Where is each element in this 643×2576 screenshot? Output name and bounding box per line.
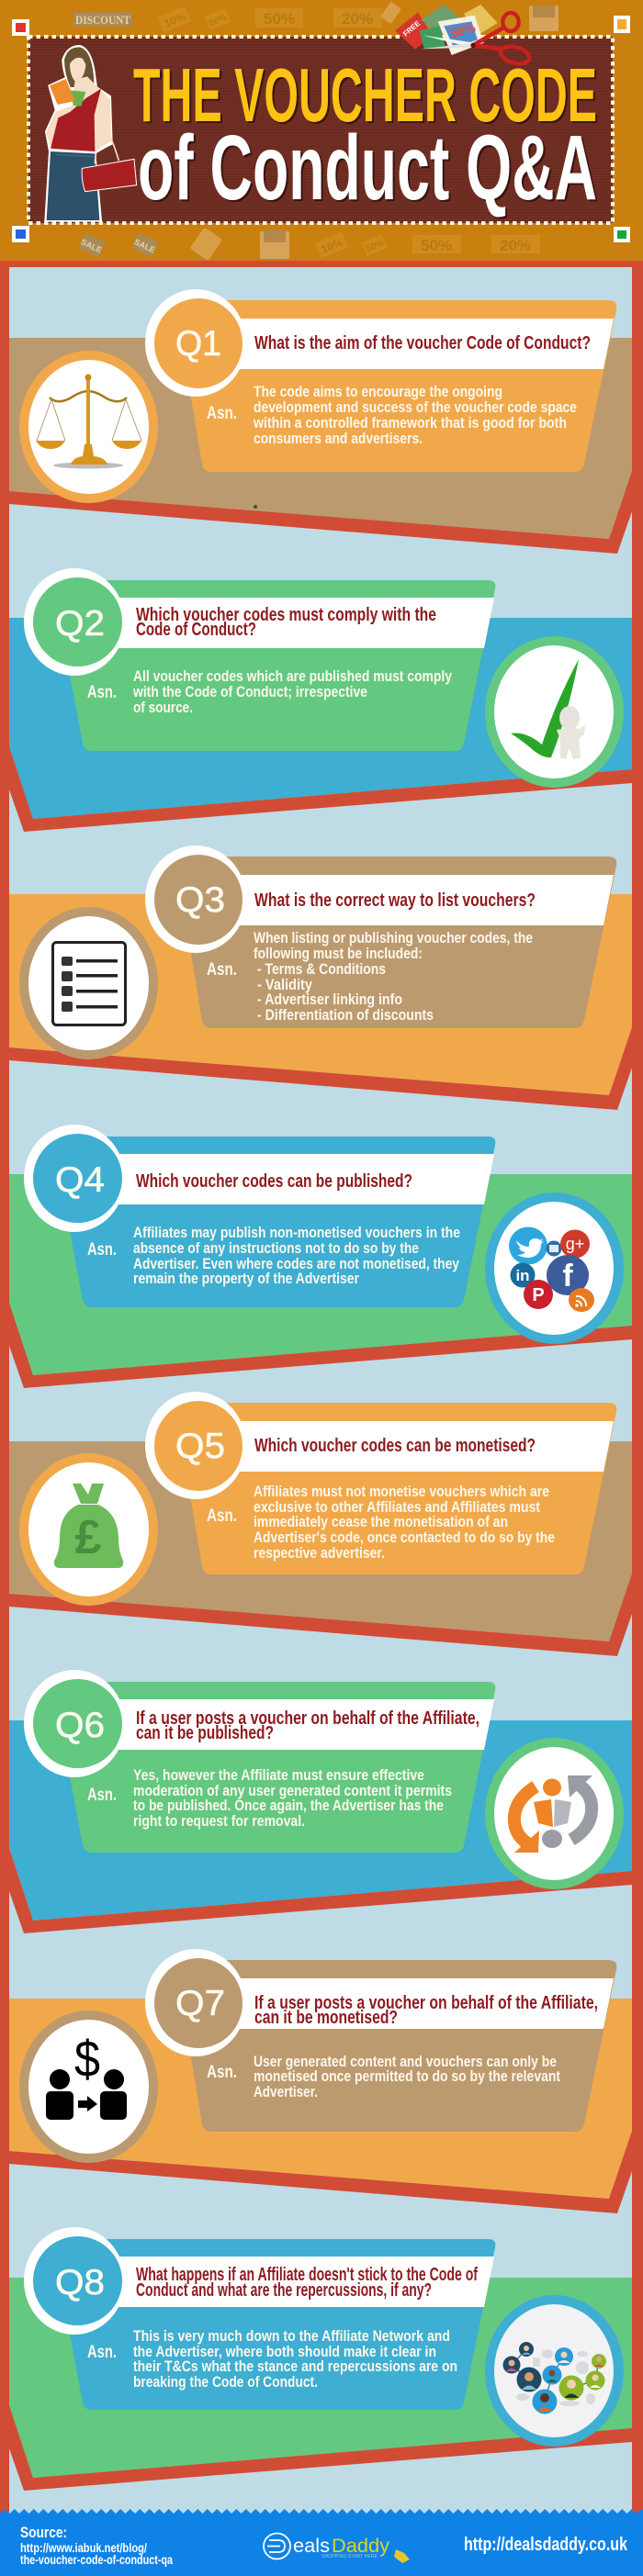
faded discount decorations	[73, 2, 558, 261]
answer: Advertiser's code, once contacted to do so by the	[254, 1529, 555, 1546]
question: Which voucher codes can be published?	[136, 1171, 412, 1192]
faded discount decorations: 50%	[421, 237, 452, 254]
badge label: Q2	[55, 604, 105, 644]
answer: of source.	[133, 699, 193, 716]
answer: to be published. Once again, the Advertiser has the	[133, 1797, 444, 1814]
question panel	[69, 1137, 495, 1307]
badge	[145, 1949, 246, 2056]
badge	[24, 568, 125, 676]
band with red edge	[9, 338, 632, 554]
question: Which voucher codes can be monetised?	[254, 1436, 536, 1456]
corner square: green	[614, 227, 630, 242]
answer: Affiliates must not monetise vouchers which are	[254, 1483, 549, 1500]
faded discount decorations: SALE	[80, 237, 104, 255]
badge	[24, 1125, 125, 1232]
faded discount decorations: 10%	[320, 236, 344, 256]
faded discount decorations: 10%	[163, 10, 187, 30]
faded discount decorations: 50%	[365, 239, 386, 254]
faded discount decorations: 20%	[342, 10, 373, 28]
answer: monetised once permitted to do so by the relevant	[254, 2067, 560, 2085]
icon: moderation cycle	[485, 1738, 624, 1889]
faded discount decorations: 50%	[264, 10, 295, 28]
logo: DealsDaddy: eals	[293, 2536, 330, 2557]
corner square: red	[12, 19, 29, 36]
answer: with the Code of Conduct; irrespective	[132, 683, 367, 700]
footer	[0, 2509, 643, 2576]
badge	[24, 1670, 125, 1777]
band with red edge	[9, 2278, 632, 2491]
section: Q8	[9, 2227, 632, 2491]
band with red edge	[9, 1999, 632, 2213]
source url: the-voucher-code-of-conduct-qa	[20, 2553, 173, 2567]
icon: checklist	[19, 907, 158, 1059]
question panel	[69, 1682, 495, 1853]
icon: scales	[19, 351, 158, 503]
answer	[254, 1483, 555, 1562]
icon: social media: f	[562, 1259, 573, 1294]
answer label: Asn.	[207, 1506, 237, 1526]
badge label: Q6	[55, 1706, 105, 1745]
answer: - Validity	[257, 976, 312, 993]
logo: DealsDaddy: SHOPPING START HERE	[322, 2554, 378, 2559]
answer: Advertiser. Even where codes are not monetised, they	[133, 1255, 459, 1272]
question panel	[69, 580, 495, 751]
question	[136, 2265, 478, 2301]
brown title panel	[28, 37, 613, 223]
band with red edge	[9, 618, 632, 832]
answer: This is very much down to the Affiliate Network and	[133, 2327, 450, 2345]
faded discount decorations: SALE	[133, 237, 157, 255]
logo: DealsDaddy	[264, 2534, 410, 2563]
answer: - Differentiation of discounts	[257, 1006, 434, 1024]
question panel	[184, 1960, 616, 2132]
section: Q7	[9, 1949, 632, 2213]
icon: people network	[485, 2295, 624, 2447]
source url: http://www.iabuk.net/blog/	[20, 2541, 147, 2555]
answer: - Advertiser linking info	[257, 991, 402, 1008]
icon: social media	[485, 1193, 624, 1344]
answer	[253, 383, 577, 447]
answer: consumers and advertisers.	[254, 430, 423, 447]
badge	[145, 1392, 246, 1499]
corner square: orange	[614, 16, 630, 33]
icon: social media: P	[532, 1285, 545, 1305]
answer: their T&Cs what the stance and repercussions are on	[133, 2358, 457, 2375]
answer: When listing or publishing voucher codes, the	[254, 929, 533, 946]
answer label: Asn.	[87, 683, 117, 702]
icon: money bag: £	[75, 1511, 102, 1564]
answer: exclusive to other Affiliates and Affiliates must	[254, 1498, 540, 1516]
answer: immediately cease the monetisation of an	[254, 1513, 508, 1530]
answer	[254, 929, 533, 1024]
question: Conduct and what are the repercussions, if any?	[136, 2280, 432, 2301]
answer: Affiliates may publish non-monetised vouchers in the	[133, 1224, 460, 1241]
corner square: blue	[12, 226, 29, 242]
answer: moderation of any user generated content it permits	[133, 1782, 452, 1799]
section: Q4	[9, 1125, 632, 1388]
question: can it be published?	[136, 1723, 274, 1743]
question panel	[184, 1403, 616, 1574]
answer: development and success of the voucher code space	[254, 398, 577, 416]
source heading: Source:	[20, 2524, 67, 2541]
icon: money exchange	[19, 2010, 158, 2163]
answer label: Asn.	[87, 1786, 117, 1805]
question	[136, 1708, 479, 1743]
faded discount decorations: 20%	[500, 237, 531, 254]
icon: social media: in	[515, 1267, 530, 1284]
answer	[133, 1224, 460, 1287]
band with red edge	[9, 1174, 632, 1388]
question panel	[69, 2239, 495, 2410]
badge label: Q1	[175, 324, 221, 364]
question: What happens if an Affiliate doesn't stick to the Code of	[136, 2265, 478, 2285]
band with red edge	[9, 1441, 632, 1656]
answer	[133, 1766, 452, 1830]
question: If a user posts a voucher on behalf of the Affiliate,	[136, 1708, 479, 1729]
badge label: Q4	[55, 1160, 105, 1200]
answer: within a controlled framework that is good for both	[253, 414, 567, 431]
illustration: woman with coupons and bag	[45, 46, 137, 221]
answer: - Terms & Conditions	[257, 960, 386, 978]
illustration: coupons and scissors	[395, 5, 531, 67]
badge label: Q3	[175, 880, 225, 920]
answer: respective advertiser.	[254, 1544, 385, 1562]
section: Q5	[9, 1392, 632, 1656]
answer: Advertiser.	[254, 2083, 318, 2100]
answer: right to request for removal.	[133, 1812, 305, 1830]
badge	[145, 289, 246, 397]
band with red edge	[9, 894, 632, 1110]
footer bar	[0, 2509, 643, 2576]
answer: Yes, however the Affiliate must ensure effective	[133, 1766, 424, 1784]
answer	[254, 2053, 560, 2100]
answer: All voucher codes which are published must comply	[133, 667, 452, 685]
section: Q6	[9, 1670, 632, 1933]
answer: the Advertiser, where both should make it clear in	[133, 2343, 436, 2360]
question	[254, 1993, 598, 2028]
answer: absence of any instructions not to do so by the	[133, 1239, 419, 1257]
band with red edge	[9, 1720, 632, 1933]
icon: money exchange: $	[74, 2030, 100, 2088]
section: Q3	[9, 846, 632, 1110]
badge label: Q8	[55, 2263, 105, 2302]
question: can it be monetised?	[254, 2008, 398, 2028]
faded discount decorations: DISCOUNT	[75, 13, 130, 27]
answer: breaking the Code of Conduct.	[133, 2373, 318, 2391]
icon: social media: g+	[566, 1235, 584, 1253]
question: What is the correct way to list vouchers?	[254, 890, 536, 911]
question	[136, 605, 436, 640]
question panel	[184, 300, 616, 472]
header orange background	[0, 0, 643, 261]
badge label: Q5	[175, 1427, 225, 1466]
question: Which voucher codes must comply with the	[136, 605, 436, 625]
header banner	[0, 0, 643, 261]
answer	[132, 667, 452, 716]
answer label: Asn.	[207, 404, 237, 423]
answer: User generated content and vouchers can only be	[254, 2053, 557, 2070]
answer label: Asn.	[87, 1240, 117, 1260]
question: Code of Conduct?	[136, 620, 256, 640]
question panel	[184, 857, 616, 1028]
answer: following must be included:	[254, 945, 423, 962]
badge label: Q7	[175, 1984, 225, 2023]
illustration: coupons and scissors: FREE	[401, 19, 423, 39]
faded discount decorations: 50%	[208, 13, 229, 28]
badge	[24, 2227, 125, 2335]
answer: remain the property of the Advertiser	[133, 1270, 359, 1287]
answer	[133, 2327, 457, 2391]
icon: money bag	[19, 1453, 158, 1606]
answer label: Asn.	[207, 960, 237, 980]
icon: check mark with figure	[485, 636, 624, 788]
answer label: Asn.	[207, 2063, 237, 2082]
source url	[20, 2541, 173, 2567]
answer label: Asn.	[87, 2343, 117, 2362]
answer: The code aims to encourage the ongoing	[254, 383, 502, 400]
illustration: coupons and scissors: 50%	[448, 20, 478, 41]
dotted border	[28, 37, 613, 223]
logo: DealsDaddy: Daddy	[332, 2536, 390, 2557]
section: Q1	[9, 289, 632, 554]
badge	[145, 846, 246, 953]
section: Q2	[9, 568, 632, 832]
